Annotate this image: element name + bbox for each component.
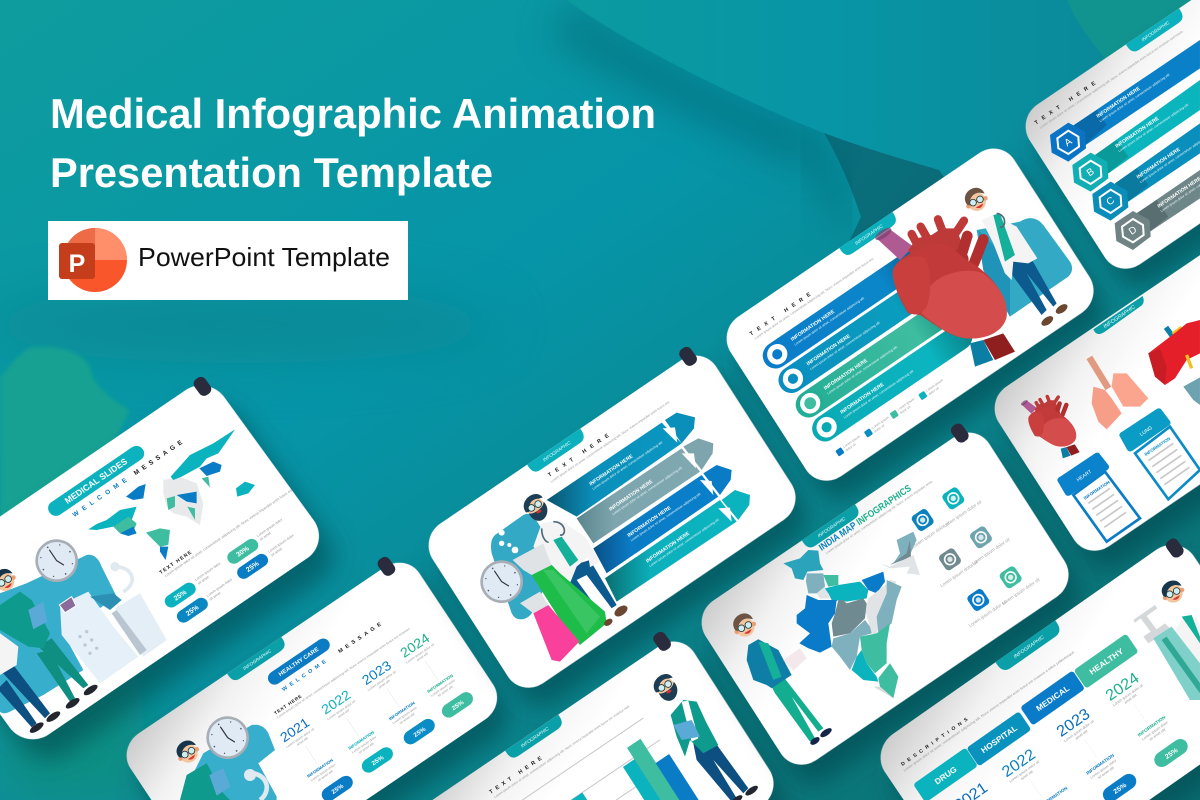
- timeline 2024: 25%: [451, 699, 466, 712]
- timeline details: 25%: [1113, 782, 1128, 796]
- timeline details: Lorem ipsum dolor: [1090, 758, 1118, 780]
- percentage pills: 25%: [185, 604, 200, 618]
- slide base and text: [717, 139, 1103, 491]
- heading: TEXT HERE: [1034, 78, 1101, 126]
- slide base and text: [397, 632, 783, 800]
- tab: [1093, 296, 1144, 334]
- timeline details: 25%: [1164, 747, 1179, 761]
- welcome message: WELCOME: [72, 474, 133, 519]
- info band 2: [774, 270, 944, 398]
- band A: [1050, 40, 1200, 162]
- tab: [505, 715, 565, 761]
- arrow band 1: [547, 413, 695, 517]
- badge label: PowerPoint Template: [138, 242, 390, 272]
- timeline 2022: INFORMATION: [347, 730, 375, 751]
- text here block: Lorem ipsum dolor sit amet, consectetuer adipiscing elit. Nunc viverra imperdiet enim fusce est.: [164, 487, 294, 578]
- icon: anatomical heart: [873, 219, 1015, 367]
- band captions: [1095, 66, 1200, 215]
- legend row: Lorem ipsum: [842, 434, 861, 449]
- title: Presentation Template: [50, 149, 493, 196]
- timeline 2021: INFORMATION: [306, 758, 334, 779]
- text here block: Lorem ipsum dolor sit amet, consectetuer adipiscing elit. Nunc viverra imperdiet enim fusce est vivamus.: [276, 626, 411, 719]
- map icons: Lorem ipsum dolor sit: [943, 499, 983, 528]
- info band 1: [758, 246, 928, 374]
- band C: [1092, 123, 1200, 221]
- panel: India map slide: [692, 421, 1078, 775]
- India map: [783, 532, 920, 698]
- legend row: Lorem ipsum: [897, 397, 915, 411]
- map icons: [910, 486, 1041, 628]
- button: healthy: HEALTHY: [1088, 647, 1125, 677]
- info band 3: Lorem ipsum dolor sit amet, consectetuer adipiscing elit: [827, 345, 898, 395]
- timeline 2021: sit amet elit: [317, 769, 334, 782]
- tab: [1126, 8, 1185, 54]
- illustration: doctor with syringe: [1133, 536, 1200, 700]
- timeline 2021: [277, 712, 356, 800]
- icon: liver: [1148, 320, 1200, 385]
- legend row: dolor sit: [899, 405, 911, 415]
- band captions: INFORMATION HERE: [1136, 146, 1182, 181]
- arrow captions: INFORMATION HERE: [608, 479, 654, 513]
- arrow captions: Lorem ipsum dolor sit amet, consectetuer adipiscing elit: [648, 518, 720, 568]
- legend row: Lorem ipsum: [925, 378, 944, 393]
- band B: [1072, 80, 1200, 192]
- illustration: doctor with heart: [873, 184, 1072, 367]
- map icons: Lorem ipsum dolor sit: [911, 520, 951, 549]
- heading: TEXT HERE: [489, 754, 546, 796]
- welcome message: [281, 620, 386, 693]
- card: heart: INFORMATION: [1083, 480, 1111, 501]
- icon: lungs: [1089, 357, 1148, 429]
- button: drug: [913, 747, 978, 800]
- timeline years: amet elit: [1075, 729, 1088, 741]
- illustration: doctor with flasks and clock: [474, 345, 699, 662]
- illustration: doctor and clock: [172, 555, 398, 800]
- heading pill: HEALTHY CARE: [278, 647, 320, 678]
- percentage pills: Lorem ipsum dolor: [206, 577, 234, 598]
- bar chart: [499, 717, 720, 800]
- timeline details: [1023, 692, 1191, 800]
- info band 4: INFORMATION HERE: [839, 381, 886, 416]
- tab: INFOGRAPHIC: [817, 516, 847, 538]
- illustration: doctor with tablet: [650, 630, 759, 800]
- title: Medical Infographic Animation: [50, 90, 656, 137]
- percentage pills: 25%: [173, 589, 188, 603]
- timeline details: INFORMATION: [1137, 715, 1167, 737]
- text here block: TEXT HERE: [159, 549, 194, 576]
- timeline details: INFORMATION: [1085, 753, 1115, 776]
- arrow band 3: [593, 465, 732, 573]
- button: drug: DRUG: [933, 765, 959, 786]
- info band 4: [807, 319, 977, 447]
- timeline years: Lorem ipsum dolor sit: [1063, 719, 1095, 743]
- world map: [88, 429, 255, 560]
- timeline 2024: [397, 628, 476, 721]
- timeline details: sit amet elit: [1149, 728, 1166, 742]
- info band 3: [791, 295, 961, 423]
- icon: PowerPoint logo: [59, 228, 127, 292]
- timeline 2023: amet elit: [378, 679, 391, 689]
- heading pill: [45, 443, 147, 519]
- panel: organs slide: [985, 209, 1200, 561]
- arrow band 4: [605, 490, 750, 602]
- timeline 2021: Lorem ipsum dolor: [310, 762, 337, 782]
- timeline details: Lorem ipsum dolor: [1141, 720, 1169, 741]
- timeline years: 2023: [1053, 705, 1093, 741]
- panel: bar chart slide: [397, 630, 783, 800]
- button: hospital: [966, 711, 1031, 766]
- tab: INFOGRAPHIC: [854, 223, 884, 246]
- heading: Lorem ipsum dolor sit amet, consectetuer adipiscing elit. Nunc viverra imperdiet enim fusce est vivamus a tellus pellentesque.: [903, 650, 1076, 772]
- band D: [1115, 170, 1200, 250]
- heading: DESCRIPTIONS: [900, 715, 972, 768]
- info band 4: Lorem ipsum dolor sit amet, consectetuer adipiscing elit: [843, 369, 914, 419]
- percentage pills: sit amet: [197, 575, 210, 586]
- illustration: arrow bands: [547, 413, 750, 602]
- slide base and text: [1016, 0, 1200, 279]
- timeline 2022: 25%: [371, 754, 386, 767]
- arrow captions: INFORMATION HERE: [627, 505, 673, 539]
- card: heart: [1057, 453, 1140, 542]
- tab: INFOGRAPHIC: [520, 726, 550, 749]
- welcome message: MESSAGE: [133, 437, 187, 477]
- slide base and text: [692, 423, 1078, 775]
- timeline 2023: 2023: [359, 657, 394, 688]
- title: [50, 90, 656, 196]
- timeline 2023: [358, 655, 438, 748]
- text here block: TEXT HERE: [273, 693, 303, 716]
- card: lung: [1119, 408, 1200, 499]
- timeline 2022: 2022: [318, 686, 354, 717]
- percentage pills: 30%: [235, 545, 251, 559]
- percentage pills: [162, 517, 301, 626]
- timeline years: [949, 669, 1148, 800]
- info band 1: Lorem ipsum dolor sit amet, consectetuer adipiscing elit: [794, 296, 865, 347]
- heading: Lorem ipsum dolor sit amet, consectetuer adipiscing elit. Nunc viverra imperdiet enim fusce est vivamus sed.: [493, 704, 631, 799]
- card: lung: LUNG: [1139, 425, 1154, 438]
- arrow captions: [588, 432, 720, 571]
- panel: healthy care timeline: [117, 553, 507, 800]
- info band 3: INFORMATION HERE: [823, 358, 869, 392]
- tab: [802, 504, 861, 550]
- band C: C: [1105, 195, 1117, 208]
- heading: Lorem ipsum dolor sit amet, consectetuer adipiscing elit. Nunc viverra imperdiet enim fusce est.: [754, 256, 875, 340]
- timeline 2023: INFORMATION: [388, 700, 416, 721]
- timeline 2021: amet elit: [296, 736, 309, 747]
- timeline 2022: Lorem ipsum dolor: [351, 735, 378, 754]
- band D: D: [1127, 224, 1139, 238]
- panel: heart information slide: [717, 139, 1103, 491]
- heading pill: MEDICAL SLIDES: [63, 456, 129, 506]
- welcome message: MESSAGE: [338, 620, 386, 655]
- timeline 2022: sit amet elit: [358, 742, 375, 755]
- timeline 2024: Lorem ipsum dolor: [430, 678, 457, 698]
- button: healthy: [1074, 634, 1139, 689]
- band captions: INFORMATION HERE: [1096, 85, 1142, 120]
- timeline 2021: 25%: [331, 783, 345, 796]
- percentage pills: sit amet: [270, 547, 283, 557]
- tab: [839, 212, 899, 258]
- illustration: organs: [1020, 296, 1200, 542]
- icon: small heart: [1020, 397, 1080, 458]
- tab: INFOGRAPHIC: [542, 440, 572, 463]
- legend row: dolor sit: [845, 442, 857, 452]
- tab: [995, 620, 1063, 673]
- tab: INFOGRAPHIC: [1141, 20, 1171, 42]
- slide base and text: [419, 346, 805, 698]
- timeline years: Lorem ipsum dolor sit: [1112, 683, 1144, 707]
- arrow captions: INFORMATION HERE: [645, 530, 691, 565]
- map icons: Lorem ipsum dolor sit: [968, 599, 1008, 628]
- slide base: [985, 209, 1200, 561]
- band captions: Lorem ipsum dolor sit amet, consectetuer adipiscing elit: [1099, 73, 1170, 123]
- welcome message: [72, 437, 187, 519]
- button: medical: MEDICAL: [1035, 684, 1071, 713]
- heading: TEXT HERE: [547, 430, 615, 479]
- slide base and text: [0, 374, 331, 750]
- percentage pills: Lorem ipsum dolor: [256, 517, 284, 538]
- heading: TEXT HERE: [749, 289, 816, 338]
- panel: arrows slide: [419, 345, 805, 698]
- percentage pills: Lorem ipsum dolor: [194, 561, 222, 582]
- timeline 2024: amet elit: [416, 652, 429, 662]
- arrow captions: Lorem ipsum dolor sit amet, consectetuer adipiscing elit: [630, 492, 701, 542]
- timeline 2023: Lorem ipsum dolor sit: [367, 670, 397, 692]
- timeline 2024: sit amet elit: [437, 685, 454, 698]
- legend row: Lorem ipsum: [871, 415, 890, 430]
- arrow captions: Lorem ipsum dolor sit amet, consectetuer adipiscing elit: [611, 466, 683, 516]
- badge: PowerPoint Template: [48, 221, 408, 300]
- button: medical: [1020, 670, 1085, 726]
- timeline 2024: Lorem ipsum dolor sit: [405, 643, 435, 664]
- slide base and text: [870, 534, 1200, 800]
- timeline 2022: Lorem ipsum dolor sit: [326, 699, 356, 721]
- percentage pills: sit amet: [259, 531, 272, 542]
- band B: B: [1085, 166, 1097, 179]
- legend row: dolor sit: [873, 423, 885, 433]
- illustration: hexagon bands: [1050, 40, 1200, 250]
- band captions: INFORMATION HERE: [1114, 115, 1161, 150]
- legend row: dolor sit: [928, 386, 940, 396]
- legend row: [835, 378, 946, 458]
- timeline years: 2024: [1102, 669, 1142, 705]
- timeline 2024: INFORMATION: [426, 673, 454, 694]
- percentage pills: 25%: [245, 560, 261, 574]
- arrow captions: INFORMATION HERE: [588, 453, 635, 487]
- band A: A: [1063, 136, 1075, 149]
- timeline 2023: 25%: [413, 726, 427, 739]
- panel: descriptions timeline slide: [870, 534, 1200, 800]
- timeline years: amet elit: [1124, 693, 1137, 705]
- tab: INFOGRAPHIC: [1013, 634, 1046, 660]
- info band 2: INFORMATION HERE: [806, 333, 852, 367]
- timeline 2023: sit amet elit: [399, 712, 415, 725]
- band captions: Lorem ipsum dolor sit amet, consectetuer adipiscing elit: [1118, 103, 1189, 153]
- icon: third organ card: [1183, 377, 1200, 405]
- timeline years: amet elit: [1020, 770, 1034, 781]
- heading: Lorem ipsum dolor sit amet, consectetuer adipiscing elit. Nunc viverra imperdiet enim fusce est.: [550, 400, 671, 484]
- timeline years: 2022: [999, 745, 1039, 781]
- card: lung: INFORMATION: [1143, 436, 1171, 457]
- welcome message: WELCOME: [281, 657, 330, 693]
- map icons: Lorem ipsum dolor sit: [1001, 576, 1041, 606]
- timeline 2024: 2024: [397, 630, 432, 661]
- heading: INDIA MAP INFOGRAPHICS: [817, 483, 914, 554]
- tab: INFOGRAPHIC: [242, 648, 273, 671]
- panel: hexagon A B C D slide: [1016, 0, 1200, 279]
- tab: [527, 429, 587, 475]
- timeline 2023: Lorem ipsum dolor: [392, 705, 419, 725]
- percentage pills: Lorem ipsum dolor: [267, 533, 295, 554]
- illustration: doctors, clock and equipment: [0, 375, 214, 735]
- heading: Lorem ipsum dolor sit amet, consectetuer adipiscing elit. Nunc viverra imperdiet enim.: [825, 479, 934, 555]
- map icons: Lorem ipsum dolor sit: [971, 537, 1011, 566]
- timeline details: sit amet elit: [1097, 766, 1115, 780]
- timeline years: Lorem ipsum dolor sit: [1009, 760, 1040, 783]
- illustration: doctor in blue coat: [729, 421, 971, 746]
- button: hospital: HOSPITAL: [980, 724, 1019, 755]
- icon: PowerPoint logo: P: [69, 250, 85, 278]
- panel: medical slides world map: [0, 374, 331, 750]
- info band 1: INFORMATION HERE: [790, 309, 836, 343]
- heading pill: [265, 636, 332, 687]
- card: heart: HEART: [1076, 469, 1093, 483]
- slide base and text: [117, 553, 507, 800]
- arrow captions: Lorem ipsum dolor sit amet, consectetuer adipiscing elit: [592, 440, 663, 491]
- tab: [227, 637, 288, 683]
- tab: INFOGRAPHIC: [1103, 304, 1137, 330]
- timeline 2022: amet elit: [337, 708, 350, 719]
- timeline 2021: 2021: [277, 714, 312, 745]
- percentage pills: sit amet: [209, 591, 221, 602]
- heading: Lorem ipsum dolor sit amet, consectetuer adipiscing elit. Nunc viverra imperdiet enim fusce est vivamus sed lorem.: [1039, 29, 1184, 130]
- arrow band 2: [577, 438, 713, 543]
- map icons: Lorem ipsum dolor sit: [939, 559, 980, 588]
- timeline 2021: Lorem ipsum dolor sit: [285, 727, 315, 749]
- info band 2: Lorem ipsum dolor sit amet, consectetuer adipiscing elit: [809, 321, 881, 371]
- timeline 2022: [318, 684, 396, 776]
